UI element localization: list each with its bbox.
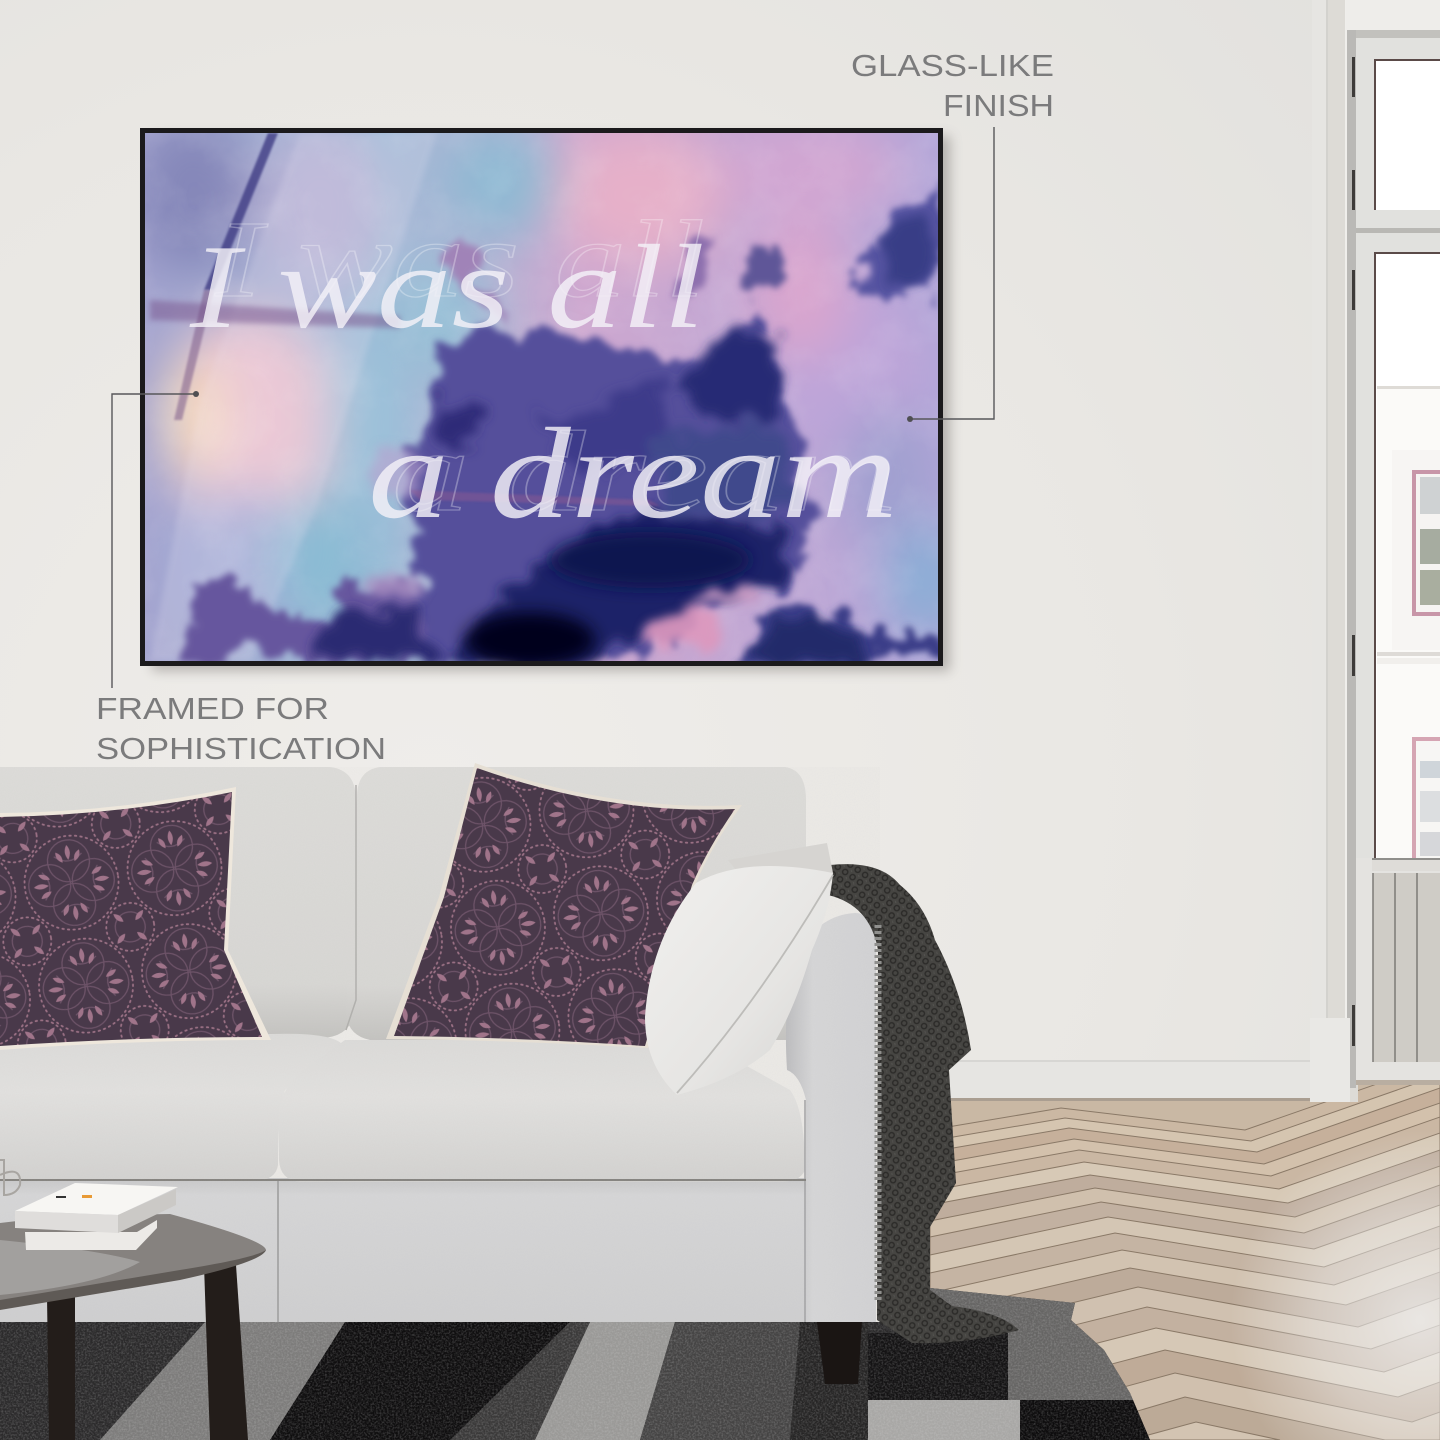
callout: framed for sophistication — [96, 391, 386, 766]
mottled light cloud texture — [200, 214, 265, 234]
sofa foot — [817, 1322, 862, 1384]
neon text: I was all: I was all — [189, 220, 705, 353]
table legs — [47, 1296, 75, 1440]
leader line — [910, 127, 994, 419]
framed artwork — [132, 115, 965, 671]
pillow: left purple — [0, 787, 271, 1050]
coffee table — [0, 1160, 266, 1440]
throw blanket — [828, 864, 1019, 1343]
book stack — [25, 1220, 157, 1250]
rug — [0, 1288, 1160, 1440]
callout: glass-like finish: FINISH — [943, 88, 1054, 123]
base — [0, 1178, 810, 1322]
neon ghost reflections: a dream — [392, 408, 897, 535]
arm — [786, 913, 876, 1322]
plinth — [1310, 1018, 1350, 1102]
callout: glass-like finish — [851, 48, 1054, 422]
leader line — [112, 394, 196, 688]
pink cloud highlights — [367, 448, 760, 650]
pillow: white — [645, 843, 833, 1095]
frame shadow — [152, 136, 950, 671]
door and window frame — [1310, 0, 1440, 1102]
back cushion right — [346, 767, 806, 1040]
outside building — [1377, 388, 1440, 858]
frame — [140, 128, 943, 666]
marble top — [0, 1214, 266, 1308]
diagonal glass reflection — [150, 133, 437, 661]
label: GLASS-LIKE — [851, 48, 1054, 83]
seat cushion right — [279, 1040, 805, 1182]
back cushion left — [0, 767, 356, 1038]
seat cushion left — [0, 1034, 342, 1181]
window pane lower — [1374, 253, 1440, 858]
darkest cloud core — [465, 532, 750, 668]
window pane upper — [1374, 60, 1440, 210]
neon text: a dream: a dream — [368, 402, 898, 546]
callout: framed for sophistication: SOPHISTICATION — [96, 731, 386, 766]
dark mullion reflection — [204, 133, 278, 290]
sofa — [0, 767, 880, 1384]
artwork: sky and clouds — [132, 115, 965, 668]
hinges — [1352, 57, 1355, 97]
lower door panel — [1356, 858, 1440, 1080]
glass cup — [0, 1160, 20, 1195]
cushion seam — [346, 785, 356, 1030]
neon ghost reflections — [222, 219, 892, 512]
soft purple cloud masses — [190, 190, 938, 661]
label: FRAMED FOR — [96, 691, 329, 726]
floor: herringbone parquet — [900, 1062, 1440, 1440]
navy cloud cores — [310, 205, 935, 661]
fabric weave — [0, 767, 880, 1322]
neon ghost reflections: I was all — [214, 198, 705, 320]
pillow: centre purple — [386, 763, 742, 1048]
baseboard — [950, 1060, 1312, 1101]
